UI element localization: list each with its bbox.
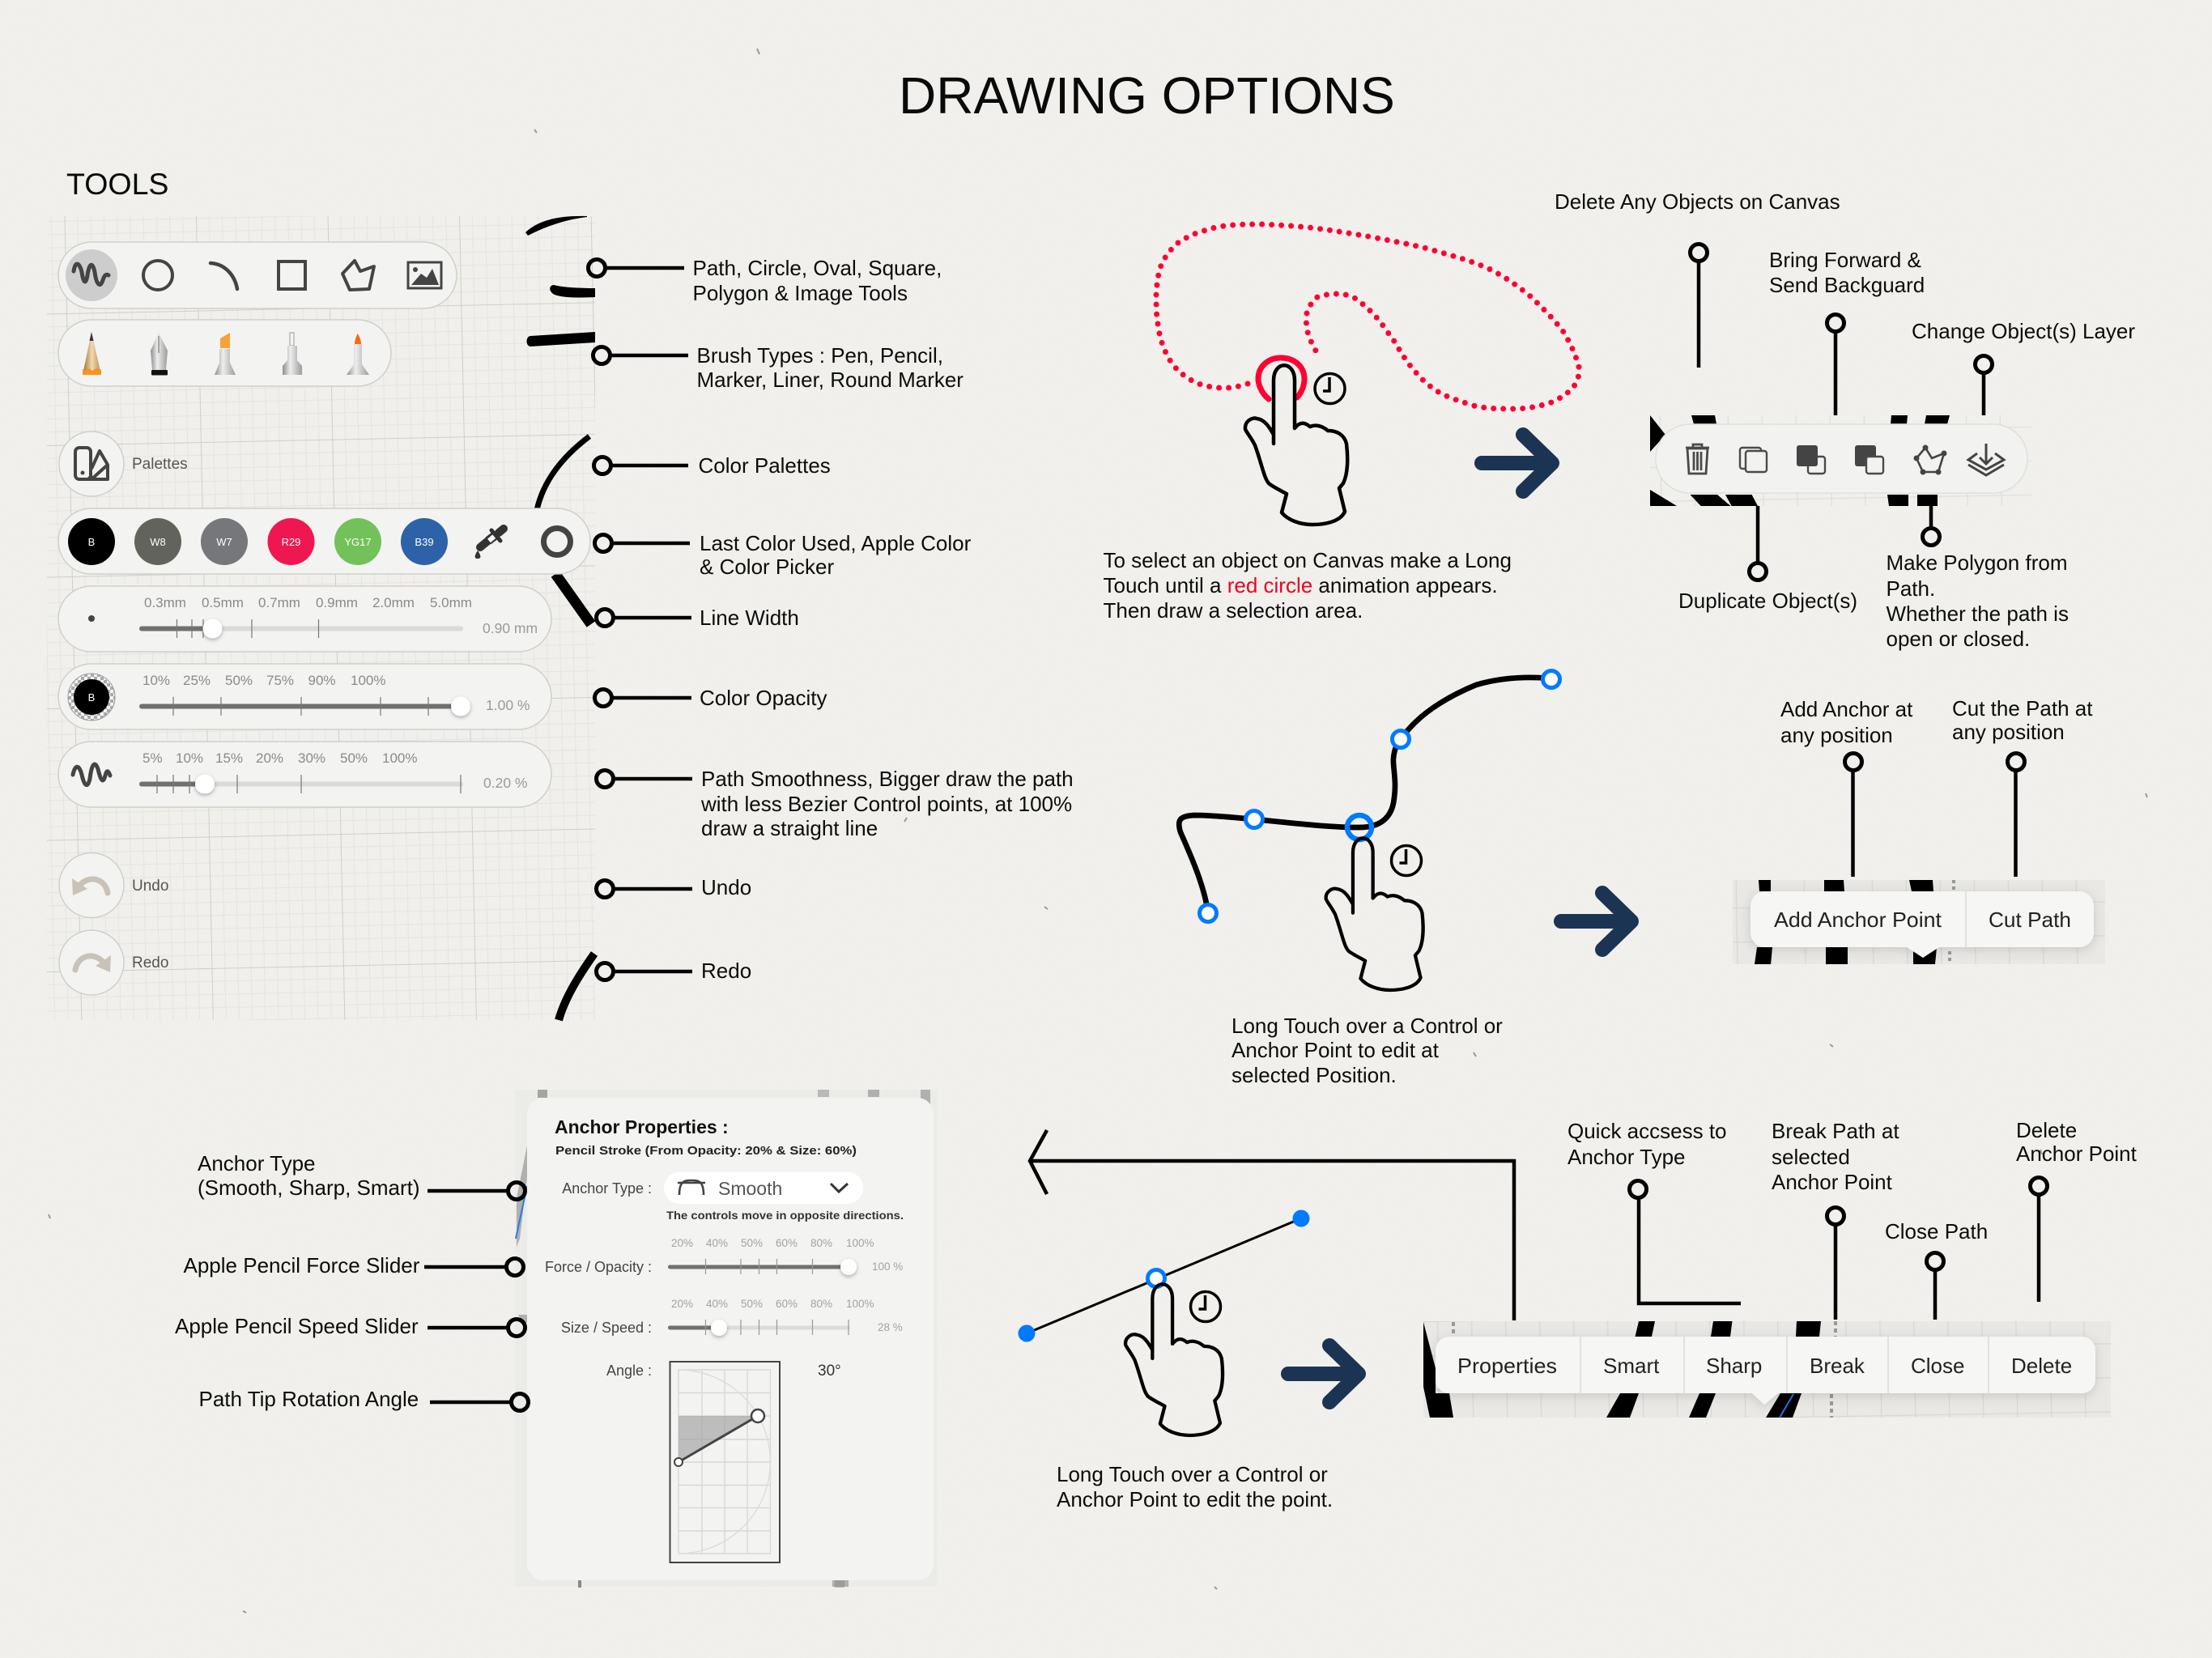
callout: add anchor: any position — [1780, 723, 1893, 747]
icon: marker — [215, 333, 236, 375]
callout: rotation angle: Path Tip Rotation Angle — [199, 1387, 419, 1411]
slider: path smoothness: 100% — [382, 750, 417, 766]
callout: break path: Break Path at — [1772, 1119, 1899, 1143]
angle label: Angle : — [606, 1363, 652, 1379]
icon: duplicate — [1740, 448, 1767, 472]
menu item: sharp: Sharp — [1706, 1354, 1762, 1378]
diagram: add anchor on path — [1179, 670, 1559, 990]
callout: color opacity: Color Opacity — [700, 686, 827, 710]
black path — [1179, 678, 1551, 913]
callouts: tools — [588, 256, 1074, 983]
callout: shape tools: Polygon & Image Tools — [693, 281, 908, 305]
callout: brush types: Marker, Liner, Round Marker — [696, 368, 963, 392]
slider: path smoothness: 20% — [256, 750, 283, 766]
slider: line width: 0.9mm — [316, 595, 358, 610]
selected anchor — [1148, 1269, 1164, 1287]
callout: undo: Undo — [701, 875, 751, 899]
brush strokes behind toolbar — [525, 216, 595, 1020]
panel: anchor menu — [1423, 1321, 2111, 1418]
toolbar: colors: B39 — [415, 536, 434, 548]
heading: tools: TOOLS — [66, 167, 168, 201]
callout: duplicate — [1678, 506, 1857, 613]
toolbar: colors: W7 — [216, 536, 232, 548]
text: selection instructions: red circle animation appears. — [1227, 573, 1498, 597]
icon: send backward — [1855, 445, 1883, 474]
diagram: edit point — [1019, 1209, 1310, 1435]
row: anchor type: Smooth — [718, 1178, 782, 1199]
icon: arc — [211, 263, 237, 289]
callout: last color used: & Color Picker — [700, 555, 834, 579]
menu item: close: Close — [1911, 1354, 1964, 1378]
callout: color palettes — [594, 453, 831, 478]
text: long touch on path: Long Touch over a Control or — [1231, 1014, 1503, 1038]
panel: add anchor menu — [1733, 880, 2105, 964]
slider: force / opacity: 60% — [776, 1237, 798, 1249]
slider: size / speed: 40% — [706, 1298, 728, 1310]
callout: delete: Delete Any Objects on Canvas — [1555, 189, 1840, 214]
menu item: delete: Delete — [2011, 1354, 2072, 1378]
callout: force slider: Apple Pencil Force Slider — [183, 1253, 420, 1278]
callout: delete — [1555, 189, 1840, 368]
icon: current color ring — [544, 528, 570, 555]
icon: hand — [1245, 365, 1347, 525]
slider: size / speed — [561, 1298, 903, 1336]
toolbar: brush types — [58, 320, 391, 386]
callout: path smoothness — [596, 767, 1074, 840]
callout: add anchor — [1780, 697, 1913, 877]
callout: make polygon: Make Polygon from — [1887, 551, 2067, 575]
callout: quick access — [1568, 1119, 1741, 1303]
anchor points — [1200, 670, 1559, 921]
menu item: add anchor point: Add Anchor Point — [1774, 908, 1942, 932]
callout: close path: Close Path — [1885, 1219, 1988, 1244]
callout: speed slider: Apple Pencil Speed Slider — [175, 1314, 419, 1338]
callout: cut path: any position — [1952, 720, 2065, 744]
icon: pencil — [83, 332, 101, 375]
slider: color opacity: 10% — [143, 673, 170, 688]
icon: delete — [1686, 444, 1709, 474]
callout: brush types: Brush Types : Pen, Pencil, — [696, 343, 943, 368]
slider: color opacity: 75% — [266, 673, 294, 688]
slider: path smoothness: 50% — [340, 750, 368, 766]
callout: delete point — [2016, 1118, 2138, 1302]
arrow: menu to properties — [1030, 1130, 1514, 1320]
button: palettes — [59, 432, 188, 496]
panel: tools screenshot — [47, 216, 595, 1020]
callout: color palettes: Color Palettes — [698, 453, 831, 478]
icon: round marker — [347, 334, 369, 375]
text: long touch on point: Long Touch over a Control or — [1057, 1462, 1328, 1486]
menu item: properties: Properties — [1457, 1354, 1557, 1378]
icon: circle — [143, 261, 172, 290]
text: selection instructions: To select an object on Canvas make a Long — [1103, 548, 1512, 572]
icon: image — [408, 262, 441, 288]
callout: change layer: Change Object(s) Layer — [1912, 319, 2135, 343]
callout: bring forward: Bring Forward & — [1769, 248, 1921, 272]
callout: force slider — [183, 1253, 523, 1278]
callout: color opacity — [594, 686, 827, 710]
icon: bring forward — [1797, 445, 1825, 474]
callout: shape tools — [588, 256, 942, 305]
icon: pen — [151, 333, 168, 376]
callout: rotation angle — [199, 1387, 528, 1411]
slider: size / speed: 60% — [776, 1298, 798, 1310]
icon: hand — [1326, 838, 1423, 990]
callout: anchor type: (Smooth, Sharp, Smart) — [198, 1175, 420, 1200]
callout: last color used — [594, 531, 972, 579]
menu item: smart: Smart — [1603, 1354, 1660, 1378]
callout: cut path — [1952, 696, 2093, 877]
slider: path smoothness: 10% — [176, 750, 203, 766]
slider: force / opacity: 100% — [846, 1237, 874, 1249]
note: controls: The controls move in opposite directions. — [666, 1209, 904, 1222]
callout: cut path: Cut the Path at — [1952, 696, 2093, 721]
slider: color opacity: 100% — [351, 673, 385, 688]
control handles — [1019, 1209, 1310, 1342]
red long-touch circle — [1258, 358, 1304, 399]
slider: path smoothness — [58, 742, 551, 807]
slider: force / opacity: 50% — [741, 1237, 763, 1249]
slider: path smoothness: 5% — [143, 750, 163, 766]
callout: line width — [596, 606, 799, 630]
slider: line width: 0.3mm — [144, 595, 186, 610]
toolbar: colors: B — [88, 536, 95, 548]
text: long touch on path: Anchor Point to edit at — [1231, 1038, 1440, 1062]
slider: path smoothness: 15% — [215, 750, 243, 766]
slider: line width: 0.90 mm — [483, 620, 538, 636]
callout: change layer — [1912, 319, 2135, 415]
callout: last color used: Last Color Used, Apple Color — [700, 531, 972, 555]
callout: anchor type: Anchor Type — [198, 1151, 316, 1175]
arrow: selection to toolbar — [1482, 435, 1552, 491]
slider: force / opacity: Force / Opacity : — [545, 1259, 652, 1275]
angle value: 30° — [818, 1363, 841, 1380]
text: long touch on point: Anchor Point to edit the point. — [1057, 1487, 1333, 1511]
title: DRAWING OPTIONS — [899, 66, 1395, 125]
callout: break path: Anchor Point — [1772, 1170, 1893, 1194]
menu item: break: Break — [1810, 1354, 1865, 1378]
callout: path smoothness: with less Bezier Control points, at 100% — [700, 792, 1072, 816]
callout: break path: selected — [1772, 1145, 1850, 1169]
button: undo — [59, 853, 168, 918]
icon: layer — [1968, 444, 2004, 475]
callout: bring forward: Send Backguard — [1769, 273, 1925, 297]
brush remnants — [517, 1090, 930, 1588]
slider: size / speed: 20% — [671, 1298, 693, 1310]
slider: size / speed: 28 % — [878, 1321, 903, 1333]
callout: make polygon: open or closed. — [1887, 627, 2030, 651]
slider: line width: 2.0mm — [372, 595, 415, 610]
callout: line width: Line Width — [700, 606, 799, 630]
slider: line width: 5.0mm — [430, 595, 472, 610]
callout: anchor type — [198, 1151, 525, 1200]
callout: quick access: Quick accsess to — [1568, 1119, 1727, 1143]
slider: color opacity: B — [88, 691, 95, 704]
panel subheading: Pencil Stroke (From Opacity: 20% & Size: 60%) — [555, 1144, 857, 1158]
icon: hand — [1125, 1284, 1223, 1435]
slider: size / speed: 100% — [846, 1298, 874, 1310]
slider: path smoothness: 30% — [298, 750, 325, 766]
text: long touch on point — [1057, 1462, 1333, 1511]
text: selection instructions: Touch until a — [1103, 573, 1227, 597]
callout: make polygon: Path. — [1887, 576, 1935, 601]
icon: polygon — [342, 261, 374, 290]
slider: size / speed: 80% — [810, 1298, 832, 1310]
button: undo: Undo — [132, 878, 168, 895]
slider: color opacity: 50% — [225, 673, 253, 688]
slider: line width: 0.5mm — [202, 595, 244, 610]
slider: force / opacity: 20% — [671, 1237, 693, 1249]
callout: brush types — [593, 343, 963, 392]
callout: make polygon — [1887, 506, 2069, 651]
callout: bring forward — [1769, 248, 1925, 415]
slider: line width: 0.7mm — [258, 595, 300, 610]
callout: speed slider — [175, 1314, 525, 1338]
button: redo — [59, 930, 168, 995]
callout: delete point: Anchor Point — [2016, 1141, 2138, 1166]
control line — [1027, 1218, 1301, 1333]
menu item: cut path: Cut Path — [1989, 908, 2071, 932]
callout: quick access: Anchor Type — [1568, 1145, 1686, 1169]
icon: freehand path — [74, 264, 108, 284]
slider: size / speed: 50% — [741, 1298, 763, 1310]
slider: force / opacity: 40% — [706, 1237, 728, 1249]
icon: square — [279, 261, 305, 289]
text: long touch on path — [1231, 1014, 1503, 1087]
dotted selection path — [1156, 224, 1579, 409]
panel: object toolbar — [1650, 415, 2031, 506]
callout: make polygon: Whether the path is — [1887, 602, 2069, 626]
slider: force / opacity: 80% — [810, 1237, 832, 1249]
button: redo: Redo — [132, 954, 168, 971]
toolbar: colors: W8 — [150, 536, 166, 548]
slider: color opacity — [58, 664, 551, 729]
slider: path smoothness: 0.20 % — [483, 775, 527, 791]
toolbar: colors — [58, 508, 590, 574]
slider: color opacity: 1.00 % — [486, 697, 530, 713]
toolbar: colors: YG17 — [344, 536, 372, 548]
text: selection instructions: Then draw a selection area. — [1103, 598, 1363, 623]
text: long touch on path: selected Position. — [1231, 1063, 1397, 1087]
slider: force / opacity: 100 % — [872, 1261, 903, 1273]
callout: undo — [596, 875, 751, 899]
callout: close path — [1885, 1219, 1988, 1320]
icon: liner — [283, 333, 302, 375]
icon: color picker — [475, 529, 504, 559]
row: anchor type — [562, 1172, 863, 1204]
icon: make polygon — [1914, 445, 1946, 474]
toolbar: colors: R29 — [282, 536, 300, 548]
icon: clock — [1190, 1292, 1221, 1321]
panel heading: Anchor Properties : — [555, 1116, 729, 1137]
callout: shape tools: Path, Circle, Oval, Square, — [693, 256, 942, 280]
row: anchor type: Anchor Type : — [562, 1180, 652, 1197]
callout: delete point: Delete — [2016, 1118, 2077, 1142]
icon: clock — [1391, 845, 1422, 876]
callout: duplicate: Duplicate Object(s) — [1678, 589, 1857, 613]
callout: redo: Redo — [701, 959, 751, 983]
chart: tip angle — [670, 1362, 780, 1562]
slider: size / speed: Size / Speed : — [561, 1320, 652, 1336]
selected anchor — [1347, 815, 1372, 840]
diagram: selection lasso — [1156, 224, 1579, 525]
icon: clock — [1315, 374, 1345, 403]
callout: break path — [1772, 1119, 1899, 1320]
slider: color opacity: 25% — [183, 673, 211, 688]
callout: redo — [596, 959, 751, 983]
slider: color opacity: 90% — [308, 673, 336, 688]
arrow: path to menu — [1561, 893, 1631, 950]
toolbar: shape tools — [58, 242, 457, 308]
callout: path smoothness: Path Smoothness, Bigger draw the path — [701, 767, 1074, 791]
panel: anchor properties — [515, 1090, 937, 1588]
slider: line width — [58, 586, 551, 652]
callout: path smoothness: draw a straight line — [701, 816, 878, 840]
button: palettes: Palettes — [132, 456, 188, 473]
slider: force / opacity — [545, 1237, 903, 1275]
callout: add anchor: Add Anchor at — [1780, 697, 1913, 721]
arrow: point to menu — [1288, 1346, 1359, 1402]
